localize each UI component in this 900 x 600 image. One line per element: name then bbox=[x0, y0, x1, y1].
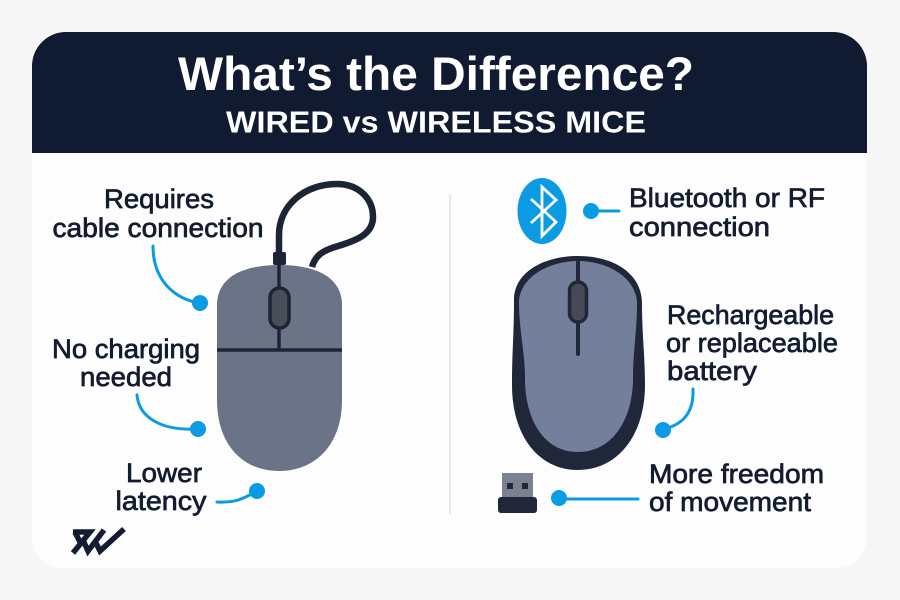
icon: bluetooth badge bbox=[518, 178, 566, 244]
header banner bbox=[32, 32, 867, 153]
label: rechargeable or replaceable battery bbox=[666, 300, 838, 386]
label: more freedom of movement bbox=[649, 459, 824, 517]
callout: lower latency bbox=[217, 483, 265, 502]
label: bluetooth or rf connection: Bluetooth or RF bbox=[629, 183, 825, 213]
title: What’s the Difference? bbox=[178, 47, 694, 100]
label: more freedom of movement: of movement bbox=[649, 487, 812, 517]
label: requires cable connection: Requires bbox=[104, 184, 214, 214]
callout: bluetooth bbox=[583, 203, 619, 219]
label: more freedom of movement: More freedom bbox=[649, 459, 824, 489]
label: rechargeable or replaceable battery: battery bbox=[667, 356, 758, 386]
icon: usb dongle bbox=[498, 473, 537, 513]
label: bluetooth or rf connection bbox=[629, 183, 825, 242]
label: lower latency: latency bbox=[116, 486, 207, 516]
callout: battery bbox=[655, 389, 693, 438]
label: rechargeable or replaceable battery: Rechargeable bbox=[667, 300, 834, 330]
icon: logo bbox=[73, 529, 124, 553]
icon: wired mouse bbox=[217, 184, 373, 471]
label: bluetooth or rf connection: connection bbox=[629, 212, 770, 242]
label: lower latency: Lower bbox=[126, 458, 202, 488]
label: rechargeable or replaceable battery: or replaceable bbox=[666, 328, 838, 358]
subtitle: WIRED vs WIRELESS MICE bbox=[226, 104, 646, 140]
icon: wireless mouse bbox=[512, 256, 645, 470]
label: no charging needed: No charging bbox=[52, 334, 200, 364]
callout: requires cable connection bbox=[153, 246, 208, 311]
label: lower latency bbox=[116, 458, 207, 516]
callout: freedom of movement bbox=[551, 490, 638, 506]
callout: no charging needed bbox=[137, 395, 206, 437]
label: requires cable connection: cable connection bbox=[52, 213, 264, 243]
center divider bbox=[449, 194, 451, 514]
label: requires cable connection bbox=[52, 184, 264, 243]
label: no charging needed: needed bbox=[80, 362, 172, 392]
label: no charging needed bbox=[52, 334, 200, 392]
